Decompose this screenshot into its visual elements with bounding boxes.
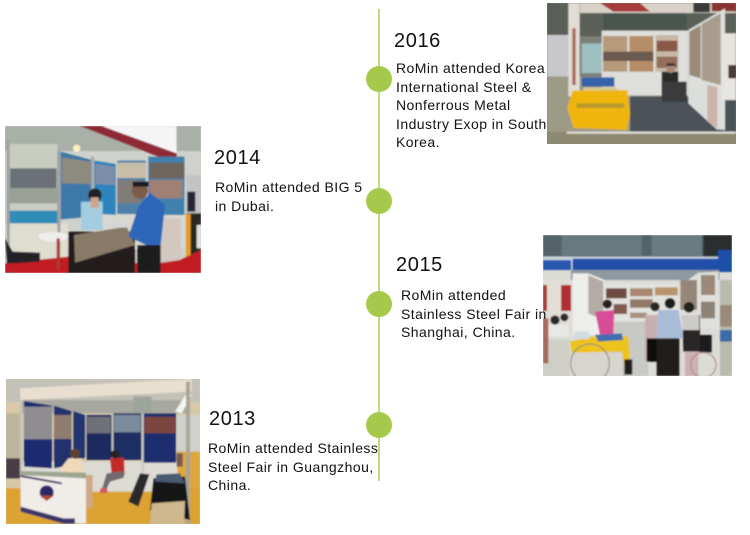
- photo: 2015 booth: [543, 235, 732, 376]
- text: 2013 event: Steel Fair in Guangzhou,: [208, 458, 374, 474]
- marker: 2016: [366, 66, 392, 92]
- heading: 2015: 2015: [396, 254, 443, 276]
- text: 2016 event: International Steel &: [396, 78, 532, 94]
- text: 2013 event: China.: [208, 477, 251, 493]
- text: 2014 event: RoMin attended BIG 5: [215, 179, 363, 195]
- marker: 2013: [366, 412, 392, 438]
- heading: 2014: 2014: [214, 147, 261, 169]
- text: 2013 event: [208, 440, 378, 493]
- text: 2015 event: [401, 287, 547, 340]
- marker: 2014: [366, 188, 392, 214]
- text: 2016 event: RoMin attended Korea: [396, 60, 545, 76]
- photo: 2016 booth: [547, 3, 736, 144]
- text: 2014 event: in Dubai.: [215, 198, 274, 214]
- text: 2015 event: Shanghai, China.: [401, 324, 516, 340]
- heading: 2016: 2016: [394, 30, 441, 52]
- text: 2016 event: Korea.: [396, 134, 440, 150]
- text: 2015 event: Stainless Steel Fair in: [401, 306, 547, 322]
- marker: 2015: [366, 291, 392, 317]
- text: 2014 event: [215, 179, 363, 214]
- photo: 2013 booth: [6, 379, 200, 524]
- text: 2016 event: [396, 60, 547, 150]
- photo: 2014 booth: [5, 126, 201, 273]
- text: 2016 event: Industry Exop in South: [396, 116, 547, 132]
- text: 2016 event: Nonferrous Metal: [396, 97, 511, 113]
- text: 2015 event: RoMin attended: [401, 287, 506, 303]
- heading: 2013: 2013: [209, 408, 256, 430]
- text: 2013 event: RoMin attended Stainless: [208, 440, 378, 456]
